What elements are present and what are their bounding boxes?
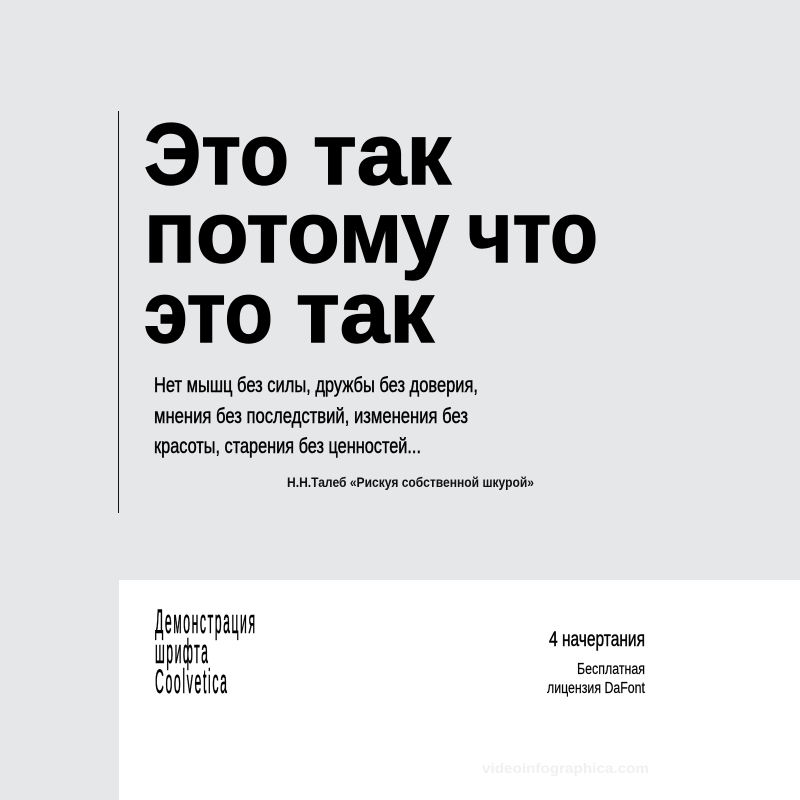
attribution: Н.Н.Талеб «Рискуя собственной шкурой»: [287, 474, 534, 490]
font demo heading: Coolvetica: [155, 664, 227, 701]
font demo heading: [155, 604, 255, 701]
title: так: [313, 106, 451, 203]
title: Это: [144, 106, 289, 203]
font demo heading: шрифта: [155, 634, 208, 671]
watermark: videoinfographica.com: [482, 760, 649, 776]
title: [144, 106, 598, 361]
quote text: Нет мышц без силы, дружбы без доверия,: [154, 374, 478, 397]
white footer panel: [119, 580, 800, 800]
title: потому: [144, 184, 449, 281]
font demo heading: Демонстрация: [155, 604, 255, 641]
title: это: [144, 264, 273, 361]
title: так: [296, 264, 434, 361]
title: что: [467, 184, 598, 281]
license note: Бесплатная: [577, 661, 645, 678]
quote text: мнения без последствий, изменения без: [154, 405, 468, 428]
license note: [547, 661, 646, 697]
styles count: 4 начертания: [549, 628, 645, 651]
quote text: [154, 374, 478, 458]
vertical rule: [118, 111, 119, 513]
quote text: красоты, старения без ценностей...: [154, 435, 421, 458]
license note: лицензия DaFont: [547, 680, 646, 697]
